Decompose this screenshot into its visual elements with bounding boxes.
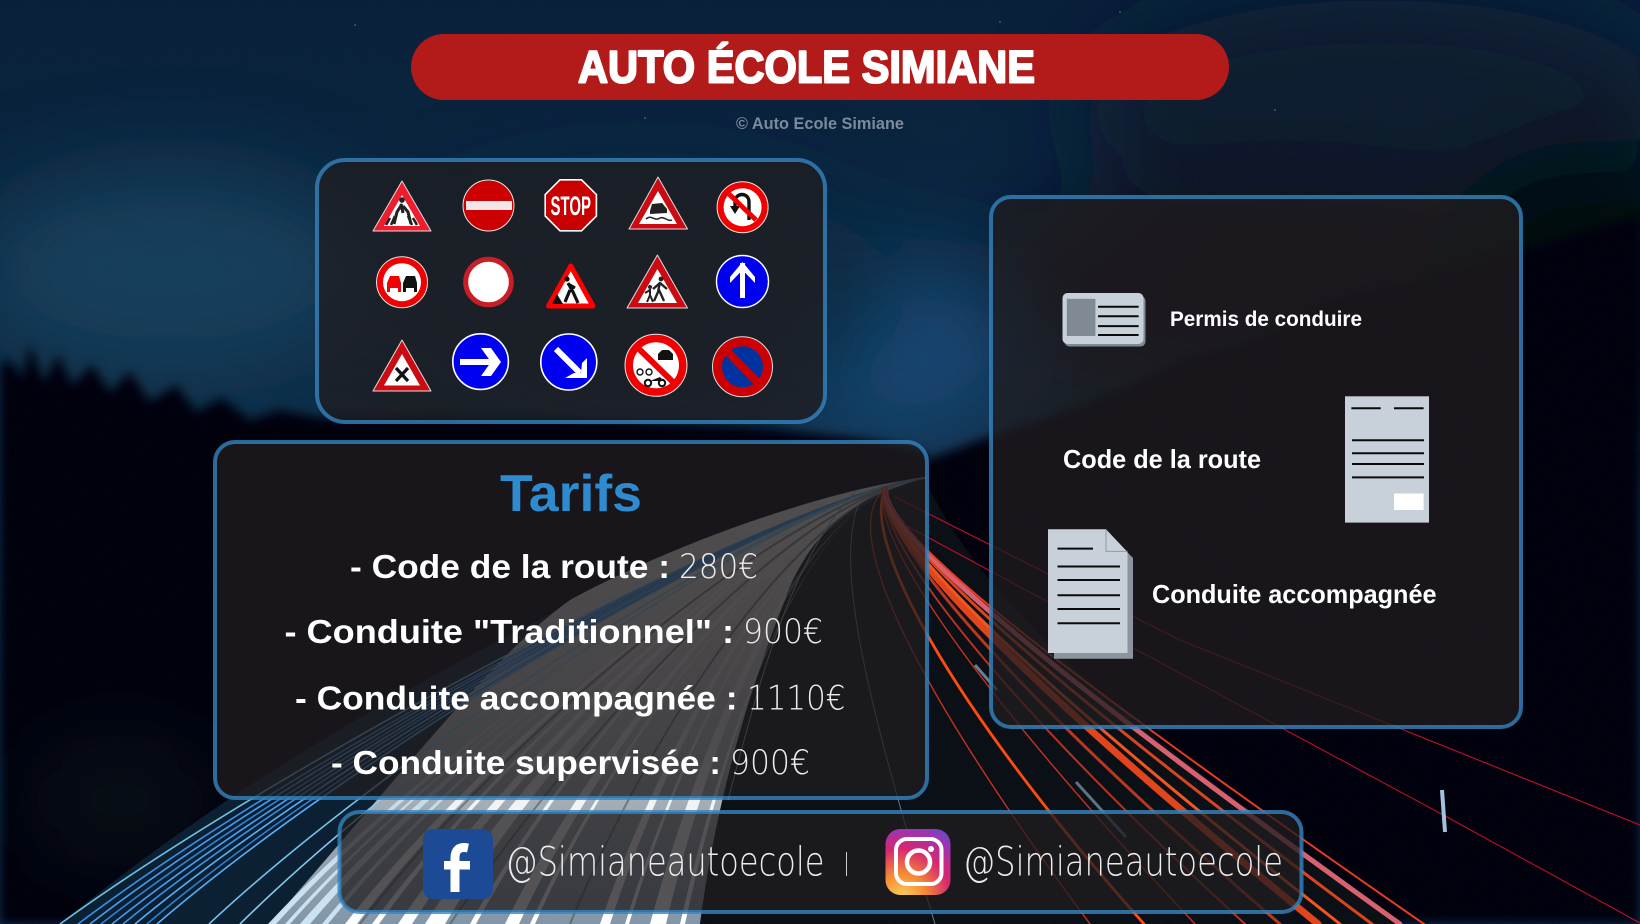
price: conduite traditionnel: 900€ — [743, 612, 823, 652]
label: permis de conduire: Permis de conduire — [1170, 307, 1362, 331]
sign: stop — [545, 180, 596, 231]
icon: stacked pages — [1048, 529, 1133, 659]
copyright: © Auto Ecole Simiane — [736, 114, 904, 133]
sign: pedestrian crossing — [373, 181, 431, 231]
sign: no parking — [712, 337, 772, 397]
sign: pass diagonal arrow — [541, 334, 597, 390]
icon: instagram — [886, 829, 950, 895]
panel: social media — [340, 812, 1302, 912]
sign: stop: STOP — [550, 191, 591, 221]
icon: facebook — [423, 829, 493, 899]
sign: straight ahead arrow — [716, 256, 768, 308]
sign: road works — [549, 266, 593, 306]
label: code de la route: Code de la route — [1063, 444, 1261, 474]
price: conduite accompagnee — [295, 678, 846, 718]
title banner — [411, 34, 1229, 100]
handle: instagram: @Simianeautoecole — [963, 840, 1283, 886]
icon: driving licence card — [1062, 293, 1146, 346]
sign: no entry — [463, 180, 514, 231]
handle: facebook: @Simianeautoecole — [506, 840, 824, 886]
price: code de la route: - Code de la route : — [350, 548, 670, 585]
icon: code document — [1345, 396, 1429, 523]
price: conduite supervisee: 900€ — [730, 743, 810, 783]
panel: documents — [991, 197, 1521, 727]
sign: junction triangle — [373, 340, 431, 391]
white light trails — [268, 478, 925, 924]
panel: tarifs — [215, 442, 927, 798]
sign: no U-turn — [717, 182, 768, 233]
sign: no overtaking — [376, 257, 428, 308]
title banner: AUTO ÉCOLE SIMIANE — [578, 42, 1035, 92]
price: conduite supervisee: - Conduite supervisée : — [331, 744, 721, 781]
sign: no vehicles — [466, 259, 511, 305]
price: code de la route: 280€ — [679, 547, 758, 587]
price: conduite accompagnee: 1110€ — [747, 678, 846, 718]
price: conduite traditionnel: - Conduite "Traditionnel" : — [284, 613, 734, 650]
price: conduite accompagnee: - Conduite accompagnée : — [295, 680, 738, 716]
sign: children crossing — [627, 255, 688, 308]
red light trails — [871, 490, 1640, 924]
blue light trails — [60, 478, 925, 924]
panel: road signs — [317, 160, 825, 422]
label: conduite accompagnee: Conduite accompagnée — [1152, 579, 1436, 609]
sign: slippery road — [629, 177, 688, 229]
sign: no motor vehicles — [625, 334, 687, 396]
sign: pass right arrow — [453, 334, 508, 389]
heading: tarifs: Tarifs — [500, 465, 642, 523]
price: code de la route — [350, 547, 758, 587]
